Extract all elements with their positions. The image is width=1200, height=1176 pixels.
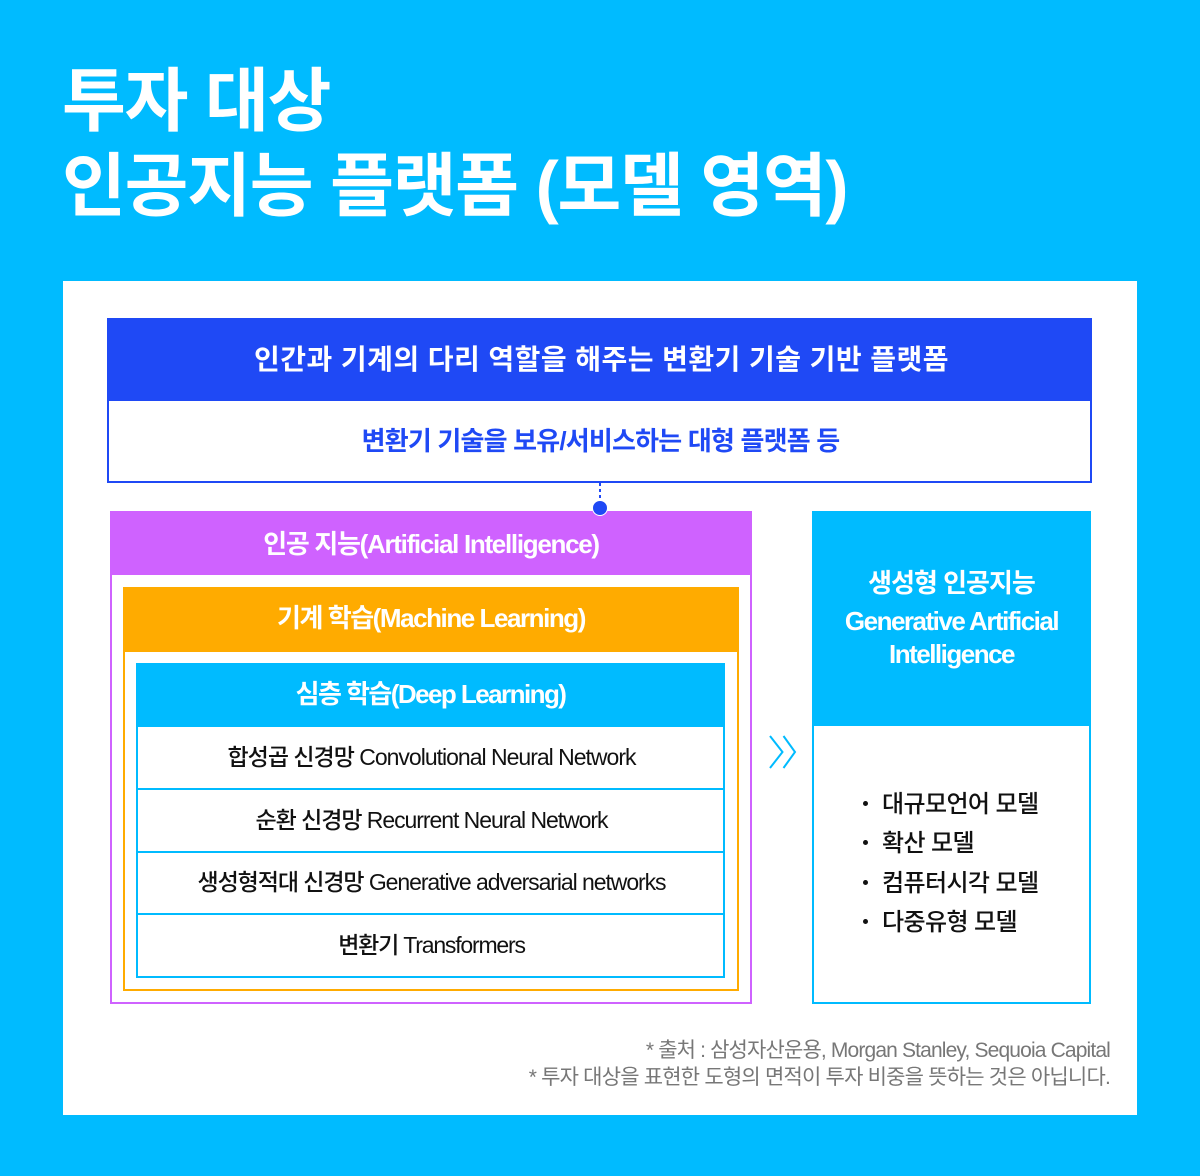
DL heading: 심층 학습(Deep Learning) xyxy=(296,678,565,708)
panel: main white card xyxy=(63,281,1137,1115)
row: GAN xyxy=(138,852,723,915)
panel: deep learning xyxy=(136,663,725,978)
panel: generative AI xyxy=(812,511,1091,1004)
ML heading: 기계 학습(Machine Learning) xyxy=(277,603,585,633)
generative AI model list: 컴퓨터시각 모델 xyxy=(882,870,1038,897)
generative AI heading: Intelligence xyxy=(889,639,1014,669)
panel: platform banner xyxy=(107,318,1092,483)
generative AI heading xyxy=(812,511,1091,726)
row: RNN xyxy=(138,790,723,853)
banner subtext: 변환기 기술을 보유/서비스하는 대형 플랫폼 등 xyxy=(362,426,839,456)
connector dot xyxy=(592,483,608,516)
title xyxy=(62,62,847,225)
AI heading: 인공 지능(Artificial Intelligence) xyxy=(263,528,599,558)
source footnote xyxy=(529,1039,1110,1089)
row: Transformers: 변환기 Transformers xyxy=(338,932,525,958)
ML heading xyxy=(123,587,739,652)
panel: machine learning xyxy=(123,587,739,991)
generative AI model list xyxy=(863,791,1038,936)
generative AI heading: Generative Artificial xyxy=(845,606,1058,636)
source footnote: * 투자 대상을 표현한 도형의 면적이 투자 비중을 뜻하는 것은 아닙니다. xyxy=(529,1066,1110,1089)
panel: artificial intelligence xyxy=(110,511,752,1004)
title: 투자 대상 xyxy=(62,62,330,140)
row: RNN: 순환 신경망 Recurrent Neural Network xyxy=(256,807,607,833)
generative AI model list: 대규모언어 모델 xyxy=(882,791,1038,818)
DL heading xyxy=(136,663,725,727)
banner heading: 인간과 기계의 다리 역할을 해주는 변환기 기술 기반 플랫폼 xyxy=(254,344,949,374)
row: CNN: 합성곱 신경망 Convolutional Neural Network xyxy=(228,744,636,770)
banner heading xyxy=(107,318,1092,401)
source footnote: * 출처 : 삼성자산운용, Morgan Stanley, Sequoia Capital xyxy=(646,1039,1110,1062)
title: 인공지능 플랫폼 (모델 영역) xyxy=(62,147,847,225)
generative AI heading: 생성형 인공지능 xyxy=(868,568,1035,598)
AI heading xyxy=(110,511,752,575)
row: CNN xyxy=(138,727,723,790)
icon: double chevron arrow xyxy=(769,735,796,769)
generative AI model list: 다중유형 모델 xyxy=(882,909,1017,936)
row: GAN: 생성형적대 신경망 Generative adversarial networks xyxy=(197,869,666,895)
generative AI model list: 확산 모델 xyxy=(882,830,974,857)
